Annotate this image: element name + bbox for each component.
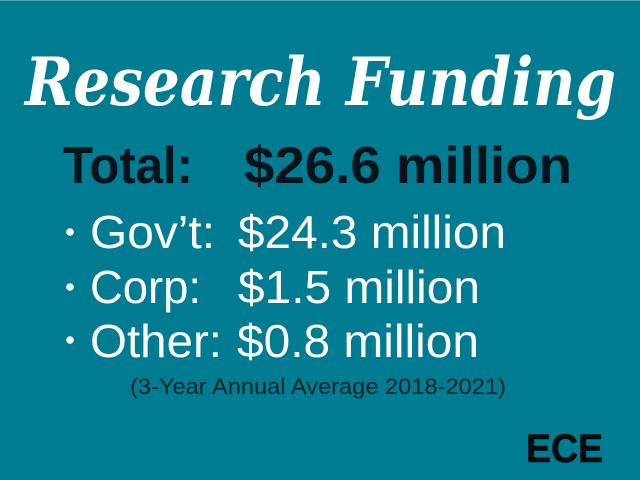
department label: ECE — [526, 427, 603, 471]
funding row: other: $0.8 million — [237, 315, 479, 367]
funding row: government: $24.3 million — [238, 206, 506, 258]
total funding line — [63, 137, 572, 195]
funding row: corporate: Corp: — [90, 261, 201, 313]
funding row: other: Other: — [90, 315, 222, 367]
footnote: averaging period: (3-Year Annual Average 2018-2021) — [130, 374, 506, 399]
total funding line: Total: — [63, 137, 193, 195]
funding row: corporate: $1.5 million — [238, 261, 480, 313]
funding row: government — [66, 206, 506, 258]
total funding line: $26.6 million — [244, 137, 572, 195]
funding row: government: Gov’t: — [90, 206, 215, 258]
funding row: corporate — [66, 261, 480, 313]
funding row: other — [66, 315, 479, 367]
